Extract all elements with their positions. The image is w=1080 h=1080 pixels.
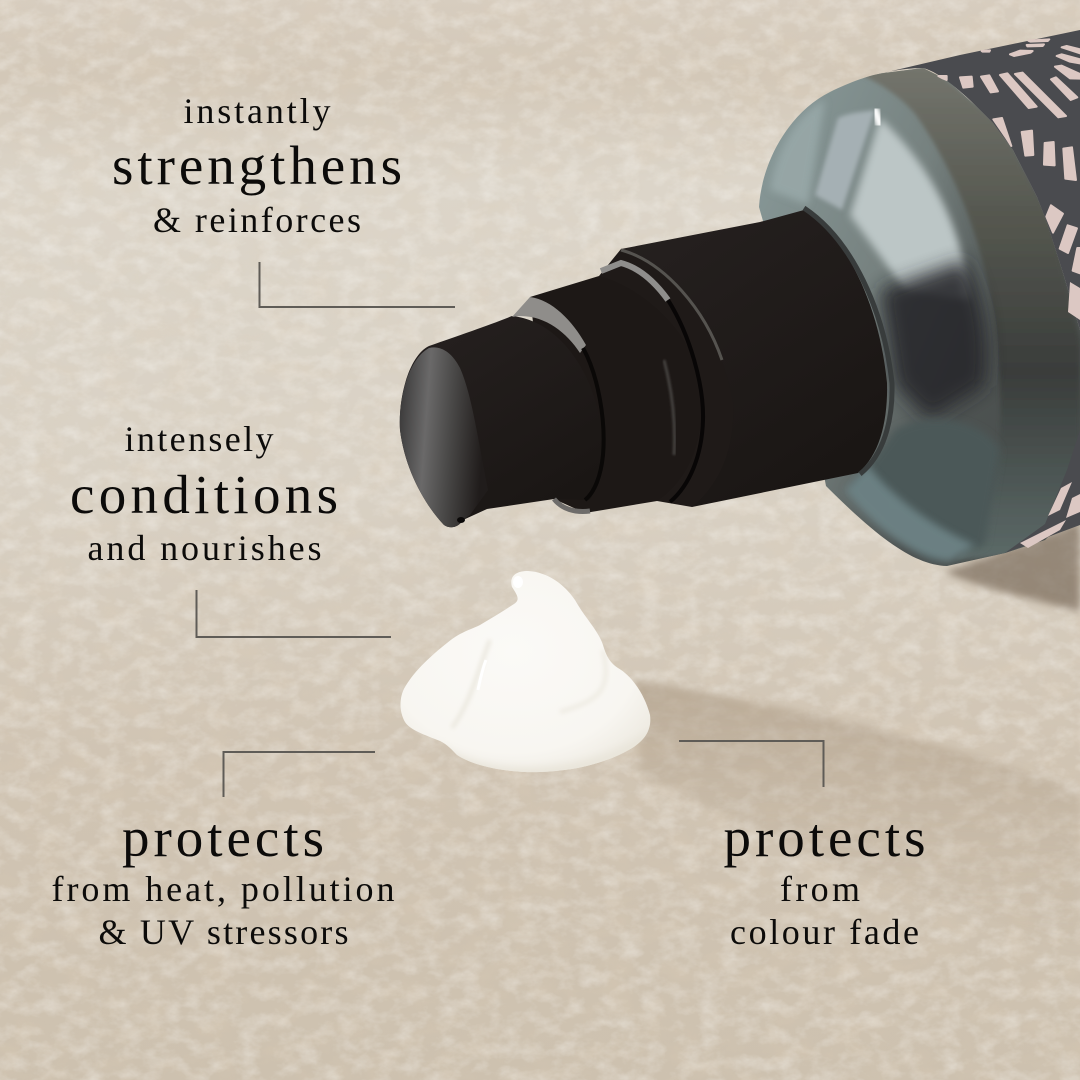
callout text lines: instantly <box>184 91 330 131</box>
leader line <box>679 741 824 787</box>
callout text lines: from <box>780 869 860 909</box>
callout: intensely conditions and nourishes <box>70 419 391 637</box>
callout: protects from heat, pollution & UV stressors <box>52 752 394 952</box>
callout text lines: from heat, pollution <box>52 869 394 909</box>
outer olive rim band <box>850 66 1080 560</box>
callout text lines <box>70 419 338 568</box>
product: pump bottle <box>400 30 1080 580</box>
cream dollop <box>400 571 655 790</box>
callout text lines: protects <box>724 807 926 868</box>
callout text lines <box>52 807 394 952</box>
nozzle opening <box>457 517 465 523</box>
callout text lines <box>724 807 926 952</box>
pump neck <box>530 276 702 513</box>
callout text lines <box>112 91 402 240</box>
callout text lines: strengthens <box>112 135 402 196</box>
callout text lines: colour fade <box>730 912 919 952</box>
label dash pattern <box>938 39 1080 273</box>
callout text lines: and nourishes <box>88 528 322 568</box>
callout text lines: protects <box>122 807 324 868</box>
cast shadow of the bottle <box>635 680 1080 950</box>
callout text lines: & reinforces <box>153 200 361 240</box>
callout text lines: intensely <box>124 419 274 459</box>
collar shoulder ring <box>599 249 733 507</box>
nozzle end cap <box>400 347 488 527</box>
callout: protects from colour fade <box>679 741 926 952</box>
callout text lines: & UV stressors <box>98 912 348 952</box>
lower label dashes <box>1020 282 1080 548</box>
cast shadow of the base <box>945 522 1080 612</box>
leader line <box>196 590 391 637</box>
pump collar <box>621 210 887 507</box>
callout: instantly strengthens & reinforces <box>112 91 455 307</box>
glass bottle base <box>750 60 1080 580</box>
callout text lines: conditions <box>70 464 338 525</box>
leader line <box>260 262 455 307</box>
leader line <box>224 752 375 797</box>
printed label <box>883 30 1080 553</box>
nozzle ring highlight <box>512 297 586 353</box>
pump nozzle <box>400 316 602 527</box>
